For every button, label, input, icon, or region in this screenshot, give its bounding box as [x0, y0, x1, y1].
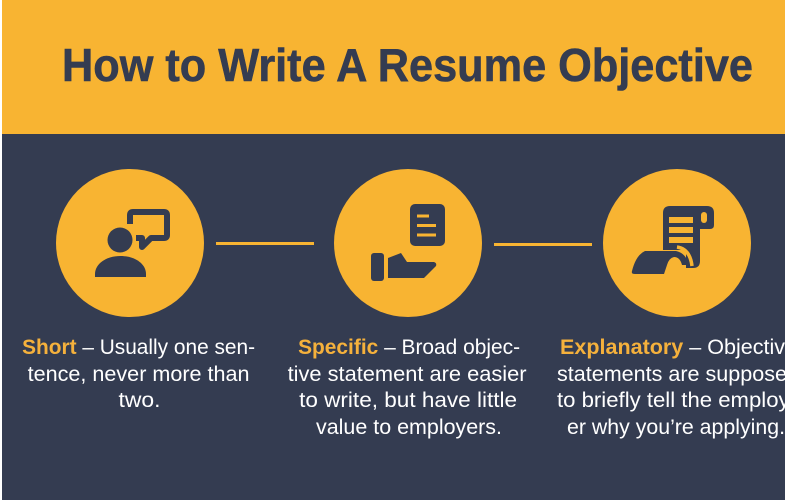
text: explanatory: to briefly tell the employ-	[557, 389, 786, 412]
circle: explanatory	[603, 169, 751, 317]
text: specific: Specific – Broad objec-	[298, 336, 521, 359]
text: specific: value to employers.	[316, 416, 502, 439]
text: explanatory: statements are supposed	[557, 363, 786, 386]
title: How to Write A Resume Objective	[62, 39, 753, 91]
text: short: Short – Usually one sen-	[22, 336, 256, 359]
text: specific: to write, but have little	[299, 389, 517, 412]
connector line 1	[216, 242, 314, 245]
icon: person with speech bubble	[95, 212, 167, 277]
circle: short	[56, 169, 204, 317]
step: short	[22, 169, 261, 412]
text: explanatory: er why you’re applying.	[567, 416, 785, 439]
step: specific	[288, 169, 532, 439]
icon: hand holding document	[371, 204, 445, 281]
text: short: tence, never more than	[28, 363, 250, 386]
text: short: two.	[118, 389, 160, 412]
text: specific: tive statement are easier	[288, 363, 527, 386]
step: explanatory	[557, 169, 786, 439]
panel: header band	[2, 0, 785, 134]
circle: specific	[334, 169, 482, 317]
right edge strip	[785, 0, 786, 502]
connector line 2	[494, 243, 592, 246]
panel: main background	[2, 134, 785, 500]
icon: scroll and hand	[632, 206, 714, 274]
